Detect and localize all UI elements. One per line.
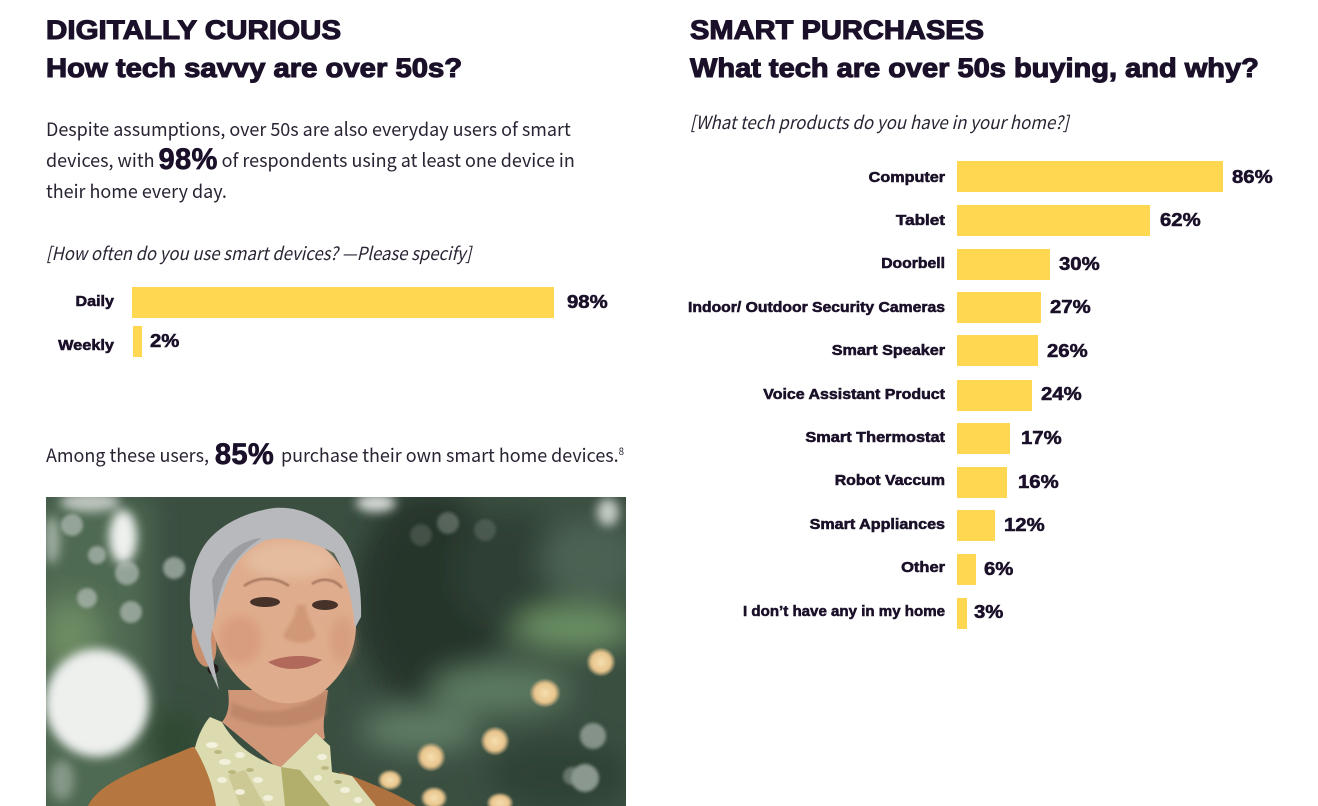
bar row: robot vaccum: Robot Vaccum <box>835 473 945 489</box>
survey question: tech products: [What tech products do you have in your home?] <box>690 109 1069 135</box>
brows and eyes <box>244 579 289 586</box>
bar row: smart speaker: 26% <box>1047 341 1088 361</box>
text block: intro paragraph: devices, with 98% of respondents using at least one device in <box>46 142 575 176</box>
warm bokeh lights <box>378 648 615 806</box>
bar row: daily: 98% <box>567 292 608 312</box>
heading: smart purchases: SMART PURCHASES <box>690 15 984 45</box>
bar row: smart appliances: Smart Appliances <box>810 517 945 533</box>
ear <box>189 616 219 668</box>
shirt <box>195 717 376 806</box>
bar row: doorbell: 30% <box>1059 254 1100 274</box>
text block: intro paragraph <box>46 116 575 204</box>
bar row: smart thermostat <box>805 423 1062 454</box>
bar row: robot vaccum <box>835 467 1059 498</box>
bar row: voice assistant: 24% <box>1041 384 1082 404</box>
bar row: other <box>901 554 1014 585</box>
bar row: voice assistant <box>763 380 1082 411</box>
bar row: other: Other <box>901 560 945 576</box>
text block: intro paragraph: Despite assumptions, over 50s are also everyday users of smart <box>46 116 571 142</box>
bar row: daily: Daily <box>76 294 114 310</box>
heading: how tech savvy are over 50s: How tech savvy are over 50s? <box>46 53 462 83</box>
bar row: weekly: Weekly <box>58 338 114 354</box>
bar chart: usage frequency <box>58 287 608 357</box>
text block: intro paragraph: their home every day. <box>46 178 227 204</box>
survey question: how often: [How often do you use smart devices? —Please specify] <box>46 240 471 266</box>
panel: smart purchases <box>688 15 1273 629</box>
bar row: smart appliances: 12% <box>1004 515 1045 535</box>
bar row: none: 3% <box>974 602 1003 622</box>
bar row: robot vaccum: 16% <box>1018 472 1059 492</box>
hair <box>190 508 361 690</box>
bar row: security cameras: Indoor/ Outdoor Security Cameras <box>688 300 945 316</box>
figure <box>88 508 416 806</box>
bar row: weekly: 2% <box>150 331 179 351</box>
face <box>210 533 356 703</box>
bar row: none <box>743 598 1004 629</box>
heading: what tech are over 50s buying: What tech are over 50s buying, and why? <box>690 53 1259 83</box>
background foliage <box>30 490 640 806</box>
bar row: other: 6% <box>984 559 1013 579</box>
bar row: security cameras <box>688 292 1091 323</box>
bar row: computer: 86% <box>1232 167 1273 187</box>
bar row: tablet: 62% <box>1160 210 1201 230</box>
bar chart: tech products owned <box>688 161 1273 629</box>
bar row: computer: Computer <box>869 170 945 186</box>
bar row: smart speaker <box>832 335 1088 366</box>
white bokeh left <box>44 492 619 800</box>
bar row: smart speaker: Smart Speaker <box>832 343 945 359</box>
heading: digitally curious: DIGITALLY CURIOUS <box>46 15 341 45</box>
cardigan <box>88 747 240 806</box>
bar row: smart thermostat: 17% <box>1021 428 1062 448</box>
bar row: smart thermostat: Smart Thermostat <box>805 430 945 446</box>
bar row: smart appliances <box>810 510 1045 541</box>
bar row: computer <box>869 161 1273 192</box>
bar row: security cameras: 27% <box>1050 297 1091 317</box>
bar row: tablet: Tablet <box>896 213 945 229</box>
panel: digitally curious <box>46 15 626 806</box>
photo: smiling older woman with short grey hair <box>46 497 626 806</box>
bar row: daily <box>76 287 608 318</box>
bar row: weekly <box>58 326 180 357</box>
bar row: doorbell: Doorbell <box>881 256 945 272</box>
nose <box>283 605 316 643</box>
mouth <box>268 656 322 669</box>
neck <box>222 690 328 770</box>
bar row: none: I don’t have any in my home <box>743 604 945 620</box>
bar row: tablet <box>896 205 1201 236</box>
bar row: voice assistant: Voice Assistant Product <box>763 387 945 403</box>
text block: 85 percent purchase: Among these users, 85% purchase their own smart home devices.8 <box>46 438 624 471</box>
bar row: doorbell <box>881 249 1100 280</box>
